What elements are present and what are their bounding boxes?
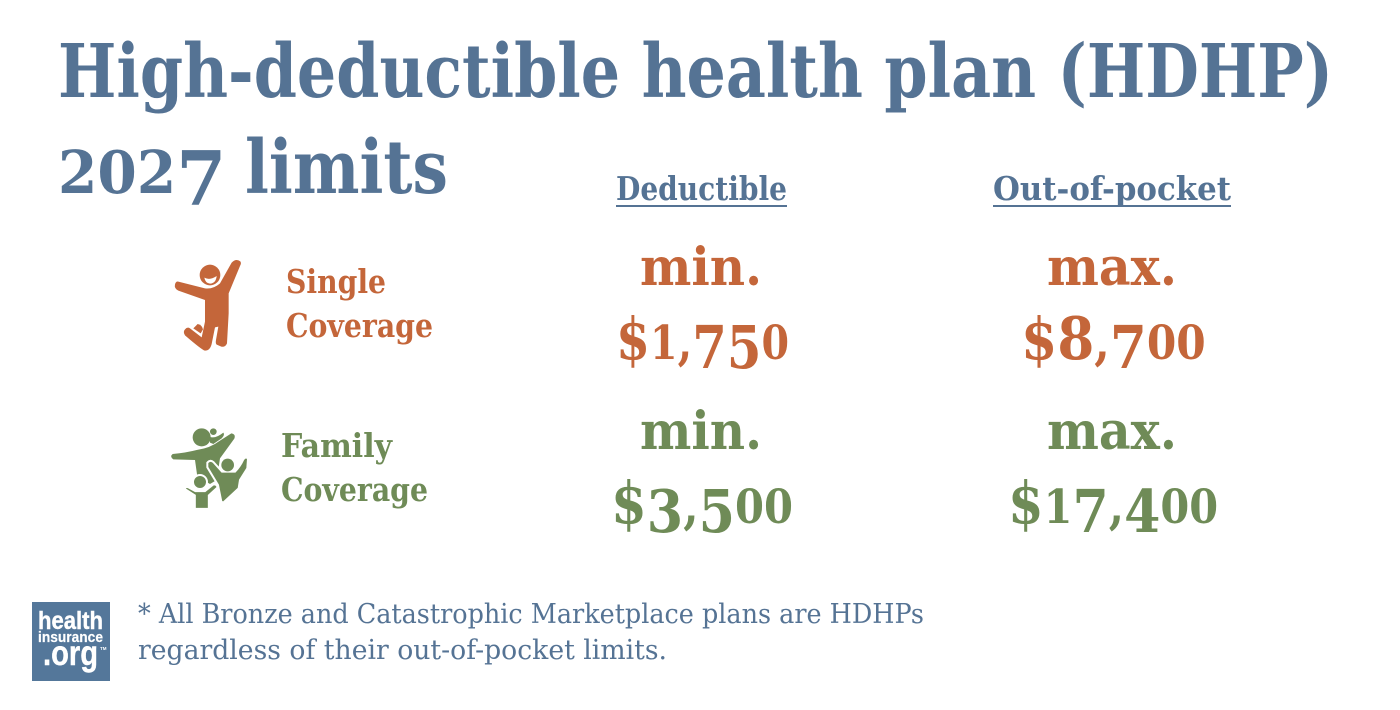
family deductible minimum: ,	[683, 478, 699, 536]
title: 7	[176, 136, 226, 223]
single deductible minimum: $1,	[616, 305, 692, 373]
single out-of-pocket maximum: max.	[1047, 237, 1177, 298]
logo: healthinsurance.org	[32, 602, 110, 681]
column heading: out-of-pocket: Out-of-pocket	[993, 169, 1232, 208]
single deductible minimum: 75	[692, 313, 761, 382]
family out-of-pocket maximum: 4	[1124, 478, 1160, 547]
logo: healthinsurance.org: health	[38, 607, 103, 635]
family deductible minimum: min.	[640, 401, 762, 462]
family out-of-pocket maximum: 7	[1073, 478, 1109, 547]
single out-of-pocket maximum: 00	[1147, 315, 1206, 371]
column heading: deductible: Deductible	[616, 169, 787, 208]
family deductible minimum: $	[611, 469, 647, 537]
family out-of-pocket maximum: $1	[1008, 469, 1073, 537]
logo: healthinsurance.org: insurance	[38, 629, 103, 646]
single deductible minimum: min.	[640, 237, 762, 298]
family out-of-pocket maximum: ,	[1109, 477, 1124, 536]
family deductible minimum: 3	[647, 478, 683, 547]
footnote: regardless of their out-of-pocket limits.	[138, 635, 667, 666]
label: single coverage: Coverage	[286, 306, 433, 345]
family deductible minimum: 5	[699, 478, 735, 547]
label: family coverage: Family	[281, 426, 393, 465]
title	[58, 29, 1333, 223]
single out-of-pocket maximum: $8,	[1021, 304, 1110, 374]
footnote	[138, 599, 924, 666]
logo: healthinsurance.org: .org	[43, 634, 98, 673]
family out-of-pocket maximum: 00	[1160, 480, 1218, 535]
title: 202	[58, 138, 176, 207]
icon: family	[171, 428, 248, 509]
family deductible minimum	[611, 401, 793, 547]
footnote: * All Bronze and Catastrophic Marketplace plans are HDHPs	[138, 599, 924, 630]
family out-of-pocket maximum	[1008, 401, 1218, 547]
single out-of-pocket maximum	[1021, 237, 1206, 383]
single out-of-pocket maximum: 7	[1110, 313, 1147, 383]
icon: single person jumping	[175, 260, 241, 351]
title: limits	[245, 125, 448, 211]
single deductible minimum	[616, 237, 789, 382]
label: single coverage: Single	[286, 262, 386, 301]
label: family coverage	[281, 426, 428, 509]
family out-of-pocket maximum: max.	[1047, 401, 1177, 462]
logo: healthinsurance.org: TM	[100, 646, 107, 651]
family deductible minimum: 00	[735, 480, 793, 535]
single deductible minimum: 0	[761, 316, 789, 371]
label: single coverage	[286, 262, 433, 345]
label: family coverage: Coverage	[281, 470, 428, 509]
